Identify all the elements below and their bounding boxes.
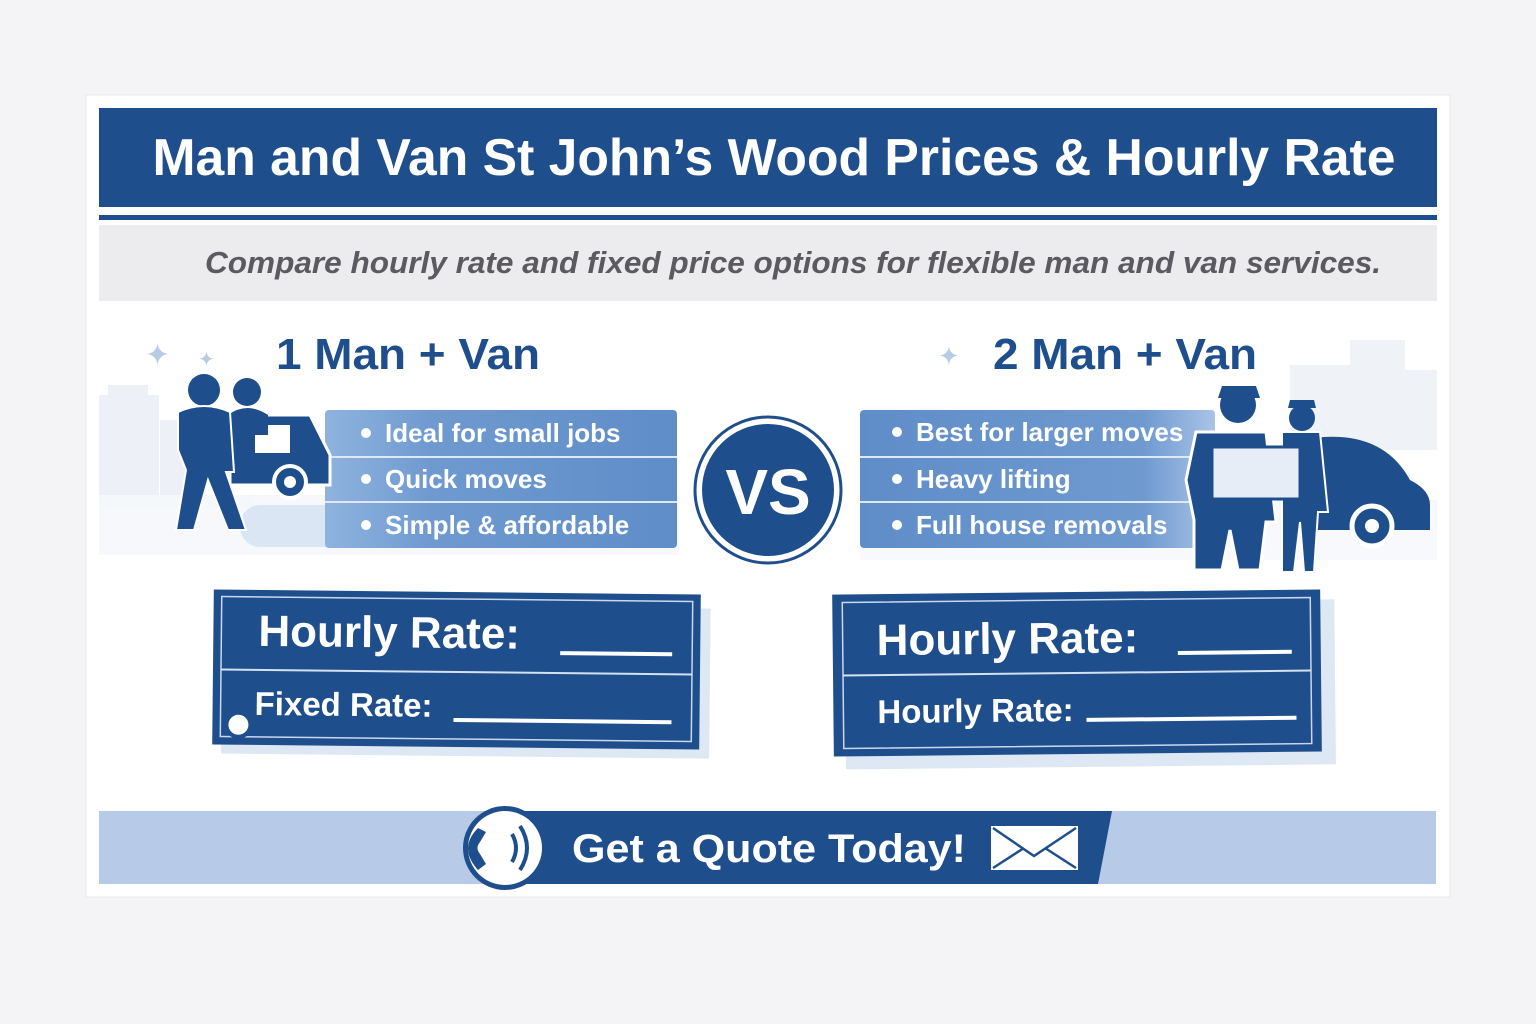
heading: 2 Man + Van xyxy=(993,330,1257,379)
bullets box: Best for larger moves xyxy=(916,417,1183,447)
subtitle: Compare hourly rate and fixed price options for flexible man and van services. xyxy=(205,245,1381,280)
price card: 1 man: Hourly Rate: xyxy=(258,607,520,659)
CTA bar: Get a Quote Today! xyxy=(572,827,966,871)
card xyxy=(86,95,1450,897)
price card: 2 man: Hourly Rate: xyxy=(876,613,1138,665)
bullets box: Simple & affordable xyxy=(385,510,629,540)
price card: 2 man xyxy=(832,589,1336,770)
icon: movers with box and van xyxy=(1186,386,1430,572)
icon: envelope xyxy=(991,826,1078,870)
bullets box: Quick moves xyxy=(385,464,547,494)
icon: phone xyxy=(468,826,527,870)
panel: 2 man + van: ✦ xyxy=(938,341,960,371)
title bar xyxy=(99,108,1437,220)
panel: 1 man + van: ✦ xyxy=(145,339,170,372)
icon: tag hole xyxy=(226,713,251,737)
bullets box: Heavy lifting xyxy=(916,464,1071,494)
subtitle xyxy=(99,225,1437,301)
bullets box xyxy=(240,410,677,548)
heading: 1 Man + Van xyxy=(276,330,540,379)
panel: 1 man + van: ✦ xyxy=(198,349,215,371)
icon: men and van xyxy=(176,374,330,530)
price card: 1 man: Fixed Rate: xyxy=(254,685,433,724)
price card: 2 man: Hourly Rate: xyxy=(877,691,1074,730)
bullets box: Ideal for small jobs xyxy=(385,418,621,448)
panel: 1 man + van xyxy=(99,330,679,555)
bullets box xyxy=(860,410,1215,548)
VS circle xyxy=(695,417,841,563)
bullets box: Full house removals xyxy=(916,510,1167,540)
title bar: Man and Van St John’s Wood Prices & Hourly Rate xyxy=(152,129,1396,187)
VS circle: VS xyxy=(725,456,811,528)
panel: 2 man + van xyxy=(860,330,1437,572)
price card: 1 man xyxy=(212,589,711,759)
CTA bar xyxy=(99,806,1436,890)
